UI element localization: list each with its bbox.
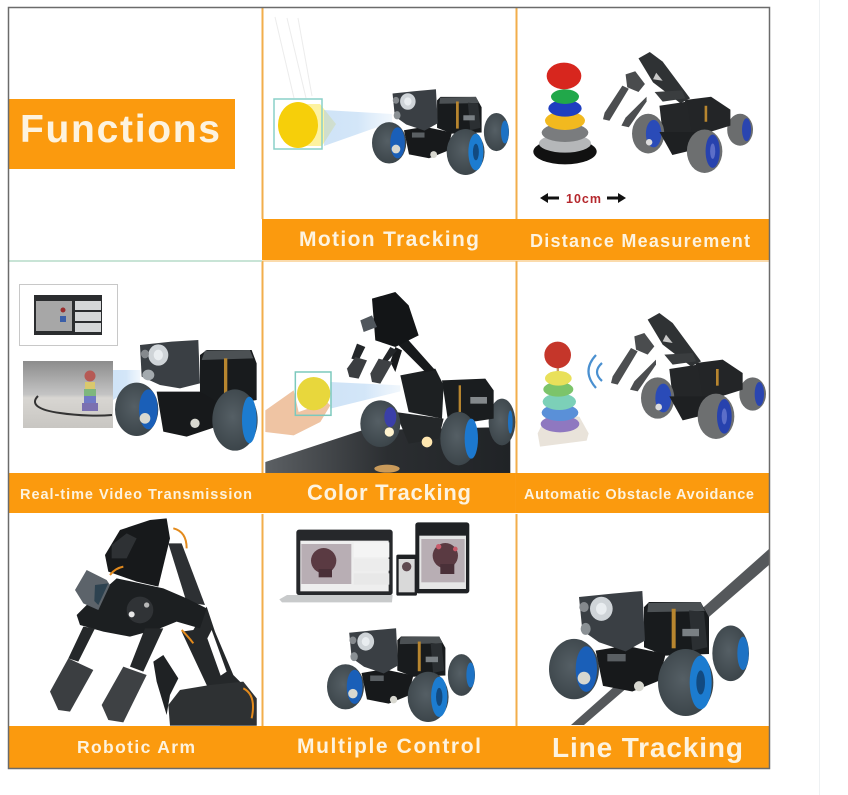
label: Motion Tracking: Motion Tracking bbox=[299, 228, 479, 251]
camera beam bbox=[330, 382, 400, 409]
camera beam bbox=[324, 110, 392, 146]
label band bbox=[9, 726, 262, 768]
icon: robot car with arm bbox=[347, 292, 515, 473]
icon: robot car bbox=[549, 591, 749, 716]
label: Line Tracking: Line Tracking bbox=[552, 732, 743, 763]
panel: automatic obstacle avoidance bbox=[516, 313, 769, 513]
icon: rainbow stack toy bbox=[538, 342, 589, 447]
panel: functions title bbox=[9, 99, 235, 169]
label band bbox=[262, 473, 516, 513]
icon: ultrasonic waves bbox=[588, 355, 602, 388]
label band bbox=[262, 726, 516, 768]
label: Multiple Control: Multiple Control bbox=[297, 735, 481, 758]
label band bbox=[516, 726, 769, 768]
icon: robot car with arm bbox=[603, 52, 753, 173]
panel: multiple control bbox=[262, 522, 516, 768]
measurement: 10cm bbox=[540, 192, 626, 206]
icon: robot car with arm bbox=[611, 313, 766, 439]
panel: motion tracking bbox=[262, 8, 516, 260]
label band bbox=[516, 219, 769, 260]
icon: tablet bbox=[415, 522, 469, 593]
label band bbox=[516, 473, 769, 513]
icon: yellow moving disc bbox=[274, 99, 336, 149]
grid lines bbox=[262, 8, 516, 726]
track line bbox=[571, 549, 769, 725]
icon: robot car bbox=[372, 89, 509, 175]
label: Robotic Arm: Robotic Arm bbox=[77, 737, 195, 757]
icon: ring stack toy bbox=[533, 63, 597, 164]
icon: phone bbox=[396, 555, 417, 596]
icon: robot car bbox=[115, 340, 258, 451]
icon: robot car bbox=[327, 628, 475, 722]
camera beam bbox=[113, 370, 140, 400]
label: Color Tracking: Color Tracking bbox=[307, 480, 471, 505]
panel: color tracking bbox=[262, 292, 516, 513]
panel: distance measurement bbox=[516, 52, 769, 260]
label band bbox=[262, 219, 516, 260]
label: Real-time Video Transmission: Real-time Video Transmission bbox=[20, 487, 252, 503]
label: Automatic Obstacle Avoidance: Automatic Obstacle Avoidance bbox=[524, 487, 754, 503]
panel: robotic arm bbox=[9, 518, 262, 768]
icon: hand holding ball bbox=[265, 372, 331, 435]
label band bbox=[9, 473, 262, 513]
table surface bbox=[265, 427, 510, 474]
heading: Functions: Functions bbox=[20, 108, 220, 151]
panel: real-time video transmission bbox=[9, 284, 262, 513]
icon: gripper arm bbox=[50, 518, 257, 726]
label: Distance Measurement: Distance Measurement bbox=[530, 231, 750, 251]
panel: line tracking bbox=[516, 549, 769, 768]
icon: camera photo bbox=[23, 361, 113, 428]
icon: app window bbox=[20, 284, 118, 346]
measurement: 10cm: 10cm bbox=[566, 192, 601, 206]
icon: laptop bbox=[279, 530, 393, 602]
